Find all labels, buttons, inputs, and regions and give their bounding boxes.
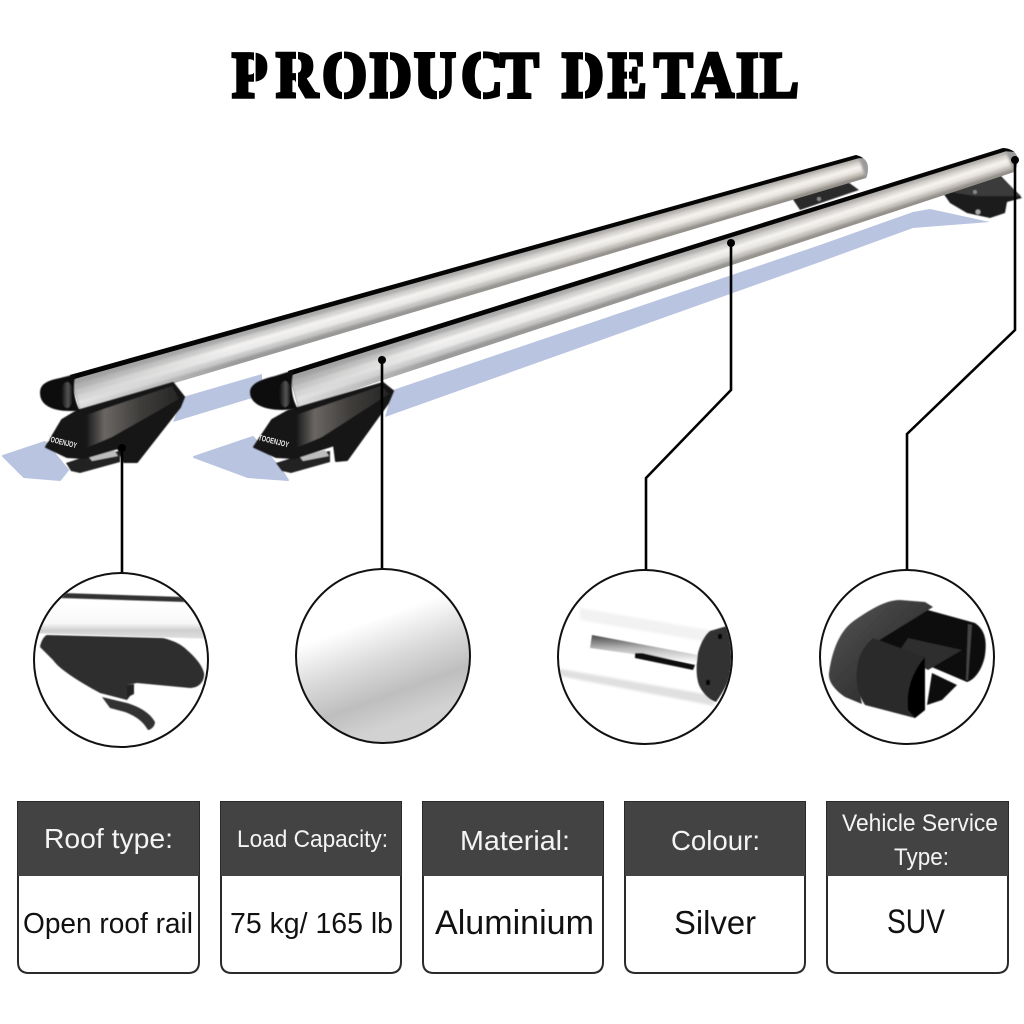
bar end cap: back bar	[40, 374, 80, 411]
spec card: colour	[625, 802, 805, 973]
detail circle: end cap	[820, 570, 994, 744]
far foot: front bar	[943, 175, 1022, 218]
spec card: colour: Silver	[674, 904, 756, 941]
detail circle: foot	[30, 573, 215, 747]
spec card: vehicle service type: Type:	[894, 844, 949, 871]
leader: bar surface	[378, 356, 386, 570]
near foot: front bar: TOOENJOY	[258, 433, 290, 450]
far foot: back bar	[792, 182, 859, 210]
near foot: back bar: TOOENJOY	[47, 434, 78, 450]
spec card: colour: Colour:	[671, 825, 760, 856]
detail circle: T-slot	[555, 570, 735, 744]
leader: end cap	[907, 156, 1019, 571]
spec card: material: Material:	[460, 825, 570, 856]
leader: T-slot	[646, 239, 735, 571]
leader lines	[118, 156, 1019, 574]
spec card: roof type: Open roof rail	[23, 908, 193, 940]
bar end cap: front bar	[250, 370, 298, 410]
spec card: load capacity	[221, 802, 401, 973]
spec card: roof type	[18, 802, 199, 973]
spec card: vehicle service type: Vehicle Service	[842, 810, 998, 837]
spec card: material	[423, 802, 603, 973]
spec card: load capacity: 75 kg/ 165 lb	[230, 908, 393, 940]
shadow: back bar	[173, 374, 262, 422]
shadow: front foot	[194, 437, 288, 480]
detail circle: aluminium surface	[296, 569, 470, 743]
near foot: front bar	[254, 383, 393, 473]
shadow: back foot	[3, 442, 68, 480]
shadow: front bar	[385, 209, 990, 417]
near foot: back bar	[46, 383, 184, 473]
back roof bar	[70, 155, 868, 410]
title: PRODUCT DETAIL	[232, 40, 799, 112]
spec card: load capacity: Load Capacity:	[237, 826, 388, 853]
leader: foot	[118, 444, 126, 574]
product illustration: roof bars	[3, 130, 1024, 480]
spec card: vehicle service type: SUV	[887, 903, 945, 941]
spec card: vehicle service type	[827, 802, 1008, 973]
front roof bar	[288, 148, 1018, 408]
spec card: roof type: Roof type:	[44, 823, 173, 854]
spec card: material: Aluminium	[435, 904, 594, 942]
